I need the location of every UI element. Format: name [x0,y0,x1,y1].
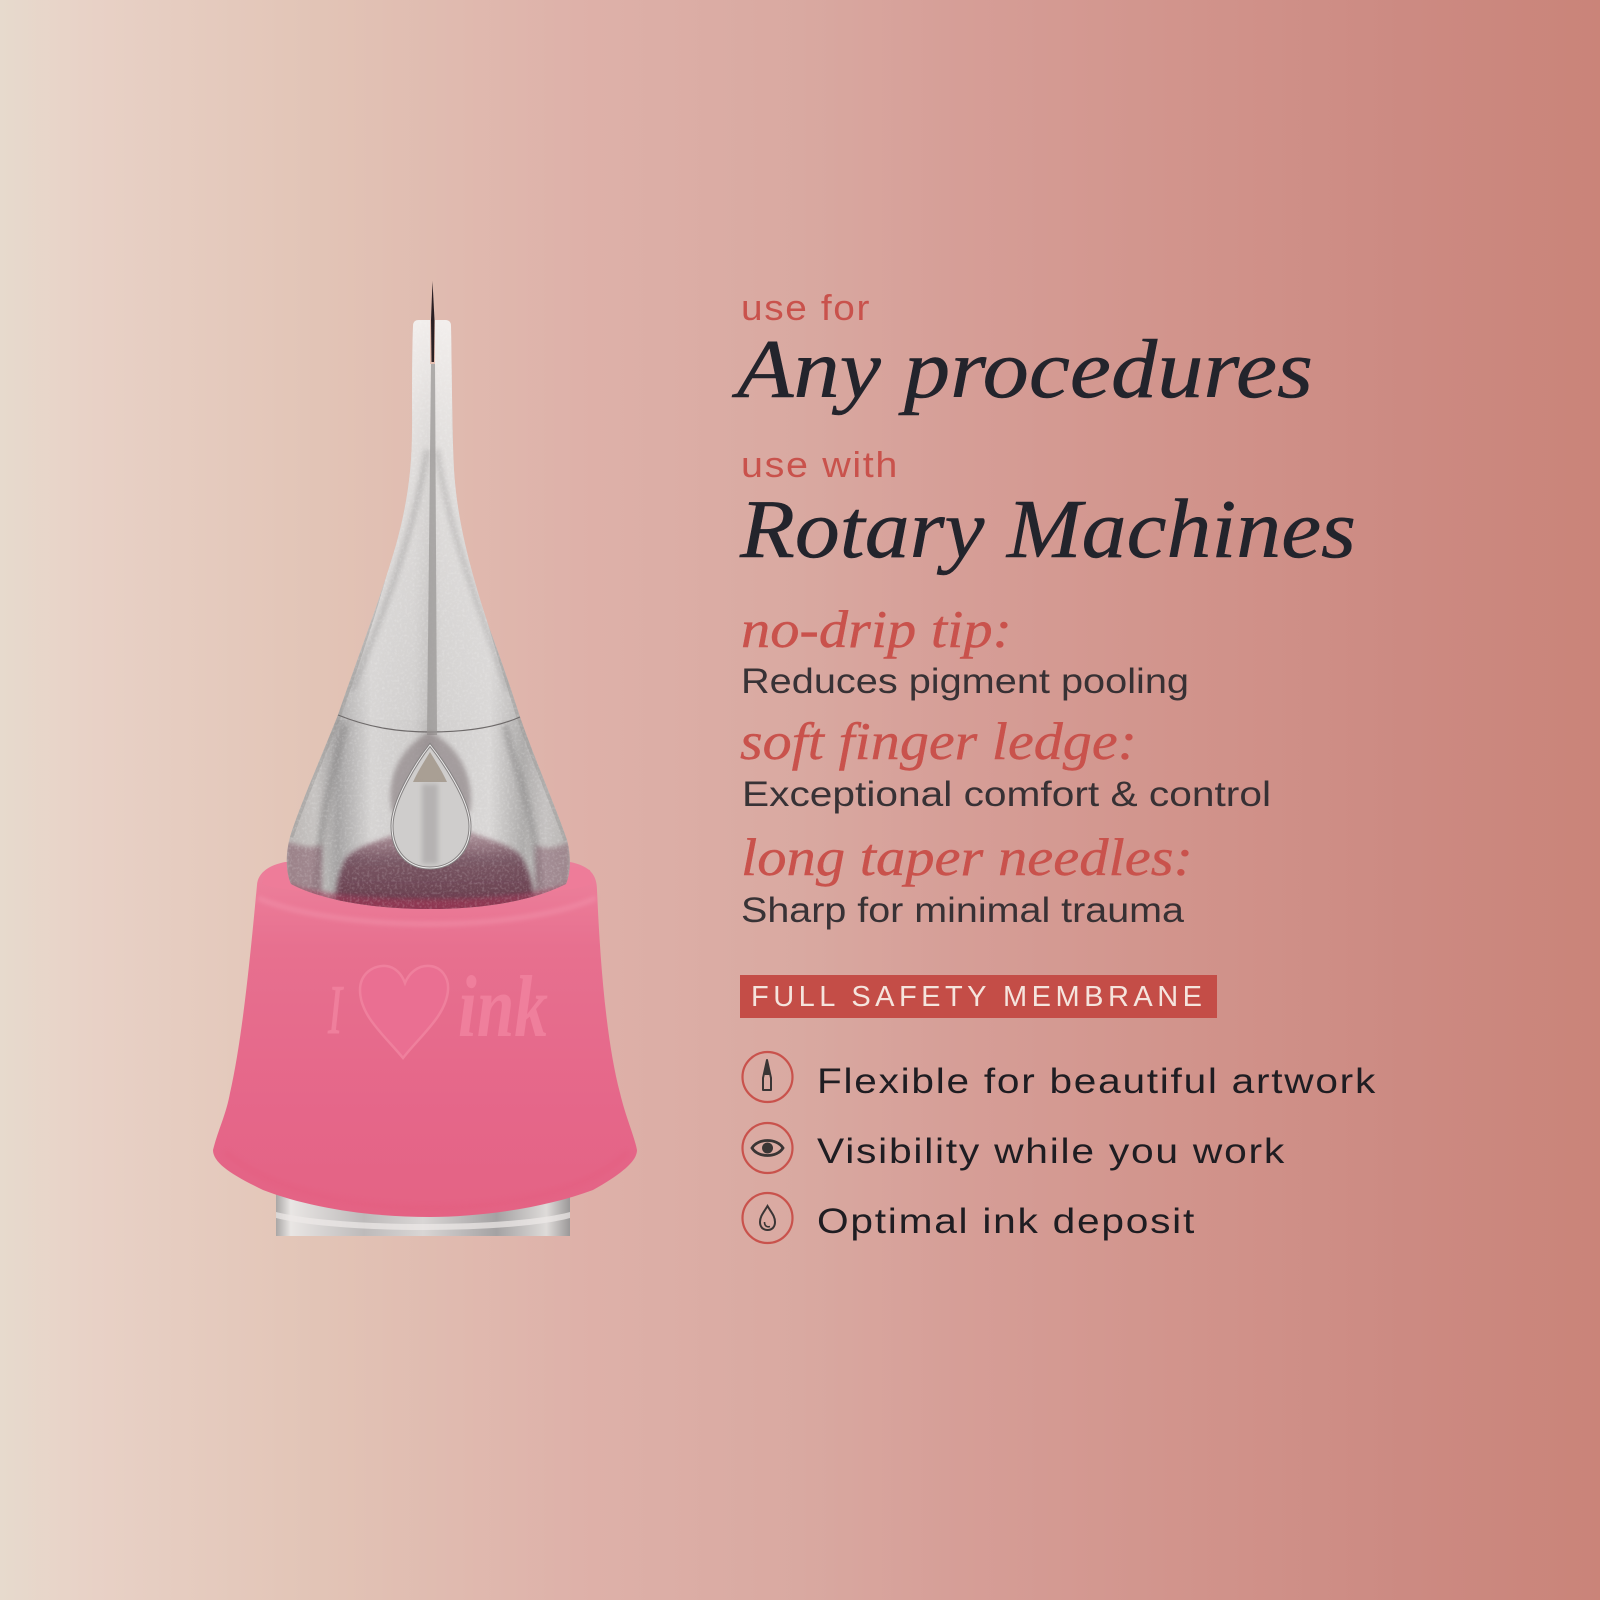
badge: full safety membrane: FULL SAFETY MEMBRANE [751,981,1202,1013]
icon: ink drop [742,1193,792,1243]
clear plastic tip [280,281,580,920]
label: use with: use with [741,444,899,485]
benefit: visibility: Visibility while you work [817,1132,1286,1171]
benefit: flexible [742,1052,1377,1102]
label: use for: use for [741,287,871,328]
product photo: needle cartridge [213,281,637,1236]
pink collar [213,862,637,1217]
upper facets [352,450,427,690]
feature: soft finger ledge: Exceptional comfort & control [742,775,1271,814]
embossed heart [360,966,448,1058]
embossed logo: I heart ink [327,959,548,1058]
feature: no-drip tip: no-drip tip: [741,601,1012,659]
feature: long taper needles: long taper needles: [741,829,1193,887]
teardrop window [392,745,470,868]
grey shadow behind teardrop [390,732,471,812]
benefit: flexible: Flexible for beautiful artwork [817,1062,1377,1101]
benefit: ink deposit: Optimal ink deposit [817,1202,1196,1241]
feature: long taper needles: Sharp for minimal trauma [741,891,1185,930]
lower facets [316,725,345,890]
metal barrel [276,1190,570,1236]
feature: soft finger ledge [740,713,1271,814]
seam line [338,715,520,732]
feature: long taper needles [741,829,1193,930]
benefit: visibility [742,1123,1286,1173]
icon: needle tip [742,1052,792,1102]
benefit: ink deposit [742,1193,1196,1243]
surface texture [287,453,570,909]
icon: eye [742,1123,792,1173]
logo word ink: ink [458,959,548,1056]
feature: no-drip tip [741,601,1189,701]
feature: soft finger ledge: soft finger ledge: [740,713,1137,771]
edge shading [290,578,386,838]
ink reservoir [335,832,535,915]
needle point [431,281,434,362]
text column [731,287,1377,1243]
logo letter I: I [327,972,344,1049]
heading: Any procedures: Any procedures [731,323,1313,416]
center needle shaft [427,362,437,735]
heading: Rotary Machines: Rotary Machines [739,483,1356,576]
slot [430,318,435,364]
feature: no-drip tip: Reduces pigment pooling [741,662,1189,701]
